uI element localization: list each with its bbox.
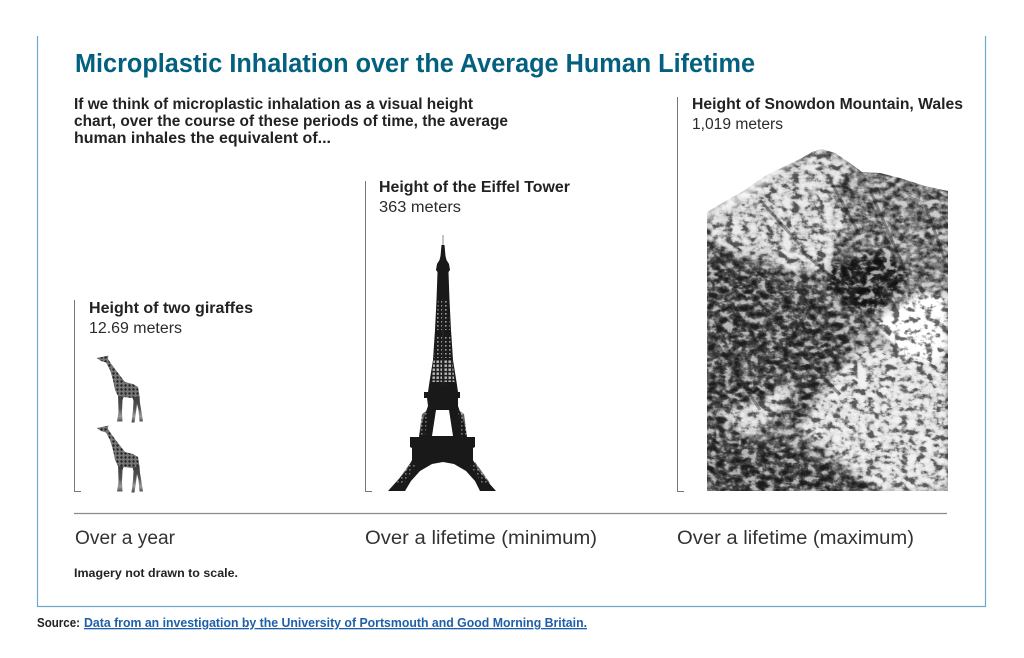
label: Snowdon: Height of Snowdon Mountain, Wales <box>692 96 963 113</box>
source: Data from an investigation by the University of Portsmouth and Good Morning Britain. <box>84 615 587 630</box>
intro text: chart, over the course of these periods of time, the average <box>74 113 508 130</box>
mountain ridge lines <box>715 180 945 410</box>
intro text <box>74 96 508 147</box>
label: Snowdon: 1,019 meters <box>692 116 783 133</box>
column: giraffes <box>74 300 253 549</box>
title: Microplastic Inhalation over the Average Human Lifetime <box>75 50 755 78</box>
snow fade along upper left edge <box>707 150 818 224</box>
tower upper arch opening <box>432 410 453 436</box>
note: Imagery not drawn to scale. <box>74 566 238 580</box>
icon: upper giraffe <box>97 356 143 422</box>
height bracket: Snowdon <box>678 97 684 492</box>
label: lifetime maximum: Over a lifetime (maximum) <box>677 528 914 549</box>
label: lifetime minimum: Over a lifetime (minimum) <box>365 528 597 549</box>
label: Snowdon <box>692 96 963 133</box>
column: Snowdon <box>677 96 963 549</box>
label: Eiffel Tower: 363 meters <box>379 199 461 216</box>
source: Source: <box>37 615 80 630</box>
label: Eiffel Tower: Height of the Eiffel Tower <box>379 179 570 196</box>
tower lattice <box>396 300 490 485</box>
image: mountain <box>700 145 950 495</box>
label: Eiffel Tower <box>379 179 570 216</box>
label: giraffes: Height of two giraffes <box>89 300 253 317</box>
column: Eiffel Tower <box>365 179 597 549</box>
icon: lower giraffe <box>97 426 143 492</box>
intro text: human inhales the equivalent of... <box>74 130 331 147</box>
baseline <box>74 512 947 514</box>
height bracket: Eiffel Tower <box>366 181 372 492</box>
label: over a year: Over a year <box>75 528 176 549</box>
label: giraffes: 12.69 meters <box>89 320 182 337</box>
icon: Eiffel Tower <box>388 235 496 491</box>
height bracket: giraffes <box>74 300 81 492</box>
intro text: If we think of microplastic inhalation as a visual height <box>74 96 473 113</box>
label: giraffes <box>89 300 253 337</box>
